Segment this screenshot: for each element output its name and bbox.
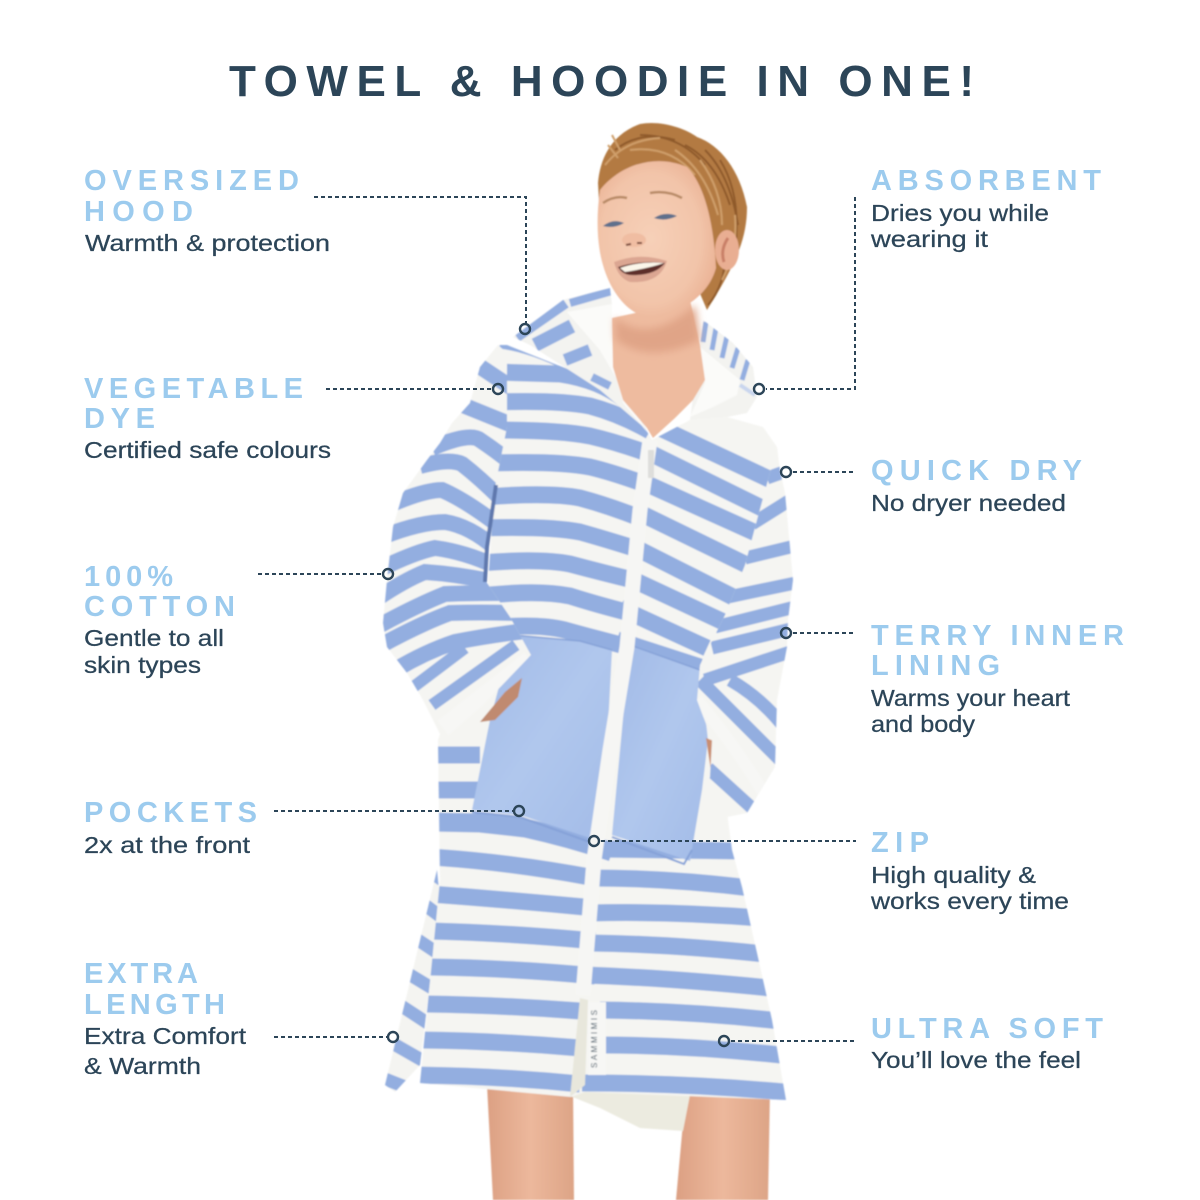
label: quick dry: No dryer needed	[871, 490, 1066, 516]
ear	[715, 230, 739, 270]
head	[598, 123, 747, 316]
label: 100% cotton: 100%	[84, 561, 173, 593]
connector: terry inner lining	[781, 628, 856, 638]
face	[598, 161, 716, 316]
figure: boy wearing striped hooded towel	[375, 123, 800, 1200]
pockets	[472, 635, 708, 864]
connector: extra length	[274, 1032, 398, 1042]
label: zip	[870, 827, 1069, 914]
label: oversized hood: OVERSIZED	[84, 165, 299, 197]
connector: quick dry	[781, 467, 856, 477]
label: quick dry	[871, 455, 1082, 516]
connector: oversized hood	[314, 197, 530, 334]
connector: absorbent	[754, 197, 855, 394]
label: vegetable dye	[84, 373, 331, 463]
legs	[487, 1085, 770, 1200]
side flap	[384, 870, 440, 1092]
zip	[583, 440, 654, 995]
label: absorbent: Dries you while	[871, 200, 1049, 226]
hands	[480, 678, 722, 778]
label: 100% cotton: Gentle to all	[84, 625, 224, 651]
hair strands	[605, 135, 738, 305]
label: terry inner lining: LINING	[871, 650, 1000, 682]
label: ultra soft: You’ll love the feel	[871, 1047, 1081, 1073]
label: absorbent: wearing it	[870, 226, 989, 252]
eyebrows	[603, 192, 682, 203]
label: terry inner lining	[871, 620, 1124, 737]
terry lining behind hem	[568, 1085, 690, 1131]
hair	[598, 123, 747, 310]
label: pockets: 2x at the front	[84, 832, 251, 858]
label: oversized hood: HOOD	[84, 196, 193, 228]
left pocket	[472, 635, 612, 842]
label: terry inner lining: and body	[871, 711, 976, 737]
label: pockets: POCKETS	[84, 797, 257, 829]
right sleeve	[696, 466, 794, 816]
terry hood lining	[567, 304, 740, 432]
label: extra length: Extra Comfort	[84, 1023, 247, 1049]
label: extra length: & Warmth	[84, 1053, 201, 1079]
label: quick dry: QUICK DRY	[871, 455, 1082, 487]
connector: vegetable dye	[326, 384, 503, 394]
label: 100% cotton	[84, 561, 235, 678]
label: terry inner lining: Warms your heart	[871, 685, 1071, 711]
label: absorbent	[870, 165, 1101, 252]
label: vegetable dye: DYE	[84, 403, 155, 435]
neck and chest	[612, 300, 705, 438]
connector: zip	[589, 836, 856, 846]
label: ultra soft	[871, 1013, 1103, 1073]
connector: ultra soft	[719, 1036, 856, 1046]
connector: 100% cotton	[258, 569, 393, 579]
label: 100% cotton: COTTON	[84, 591, 235, 623]
label: absorbent: ABSORBENT	[871, 165, 1101, 197]
label: oversized hood	[84, 165, 330, 256]
hood left	[514, 287, 641, 425]
sleeve fold shadow	[485, 485, 496, 582]
label: zip: works every time	[870, 888, 1069, 914]
eyes	[603, 214, 677, 227]
label: extra length: EXTRA	[84, 958, 198, 990]
label: extra length	[84, 958, 247, 1079]
connector: pockets	[274, 806, 524, 816]
brand label	[588, 1002, 606, 1075]
front slit	[570, 998, 588, 1097]
neck shadow	[615, 305, 700, 352]
left sleeve	[382, 346, 532, 732]
label: terry inner lining: TERRY INNER	[871, 620, 1124, 652]
mouth	[614, 257, 667, 282]
right pocket	[612, 645, 708, 861]
label: ultra soft: ULTRA SOFT	[871, 1013, 1103, 1045]
hood right	[690, 320, 756, 420]
hoodie torso	[419, 344, 787, 1101]
label: zip: High quality &	[871, 862, 1036, 888]
label: pockets	[84, 797, 257, 858]
label: zip: ZIP	[871, 827, 929, 859]
label: vegetable dye: Certified safe colours	[84, 437, 331, 463]
label: 100% cotton: skin types	[84, 652, 201, 678]
brand label: SAMMIMIS	[590, 1010, 599, 1068]
title: TOWEL & HOODIE IN ONE!	[229, 57, 974, 106]
label: extra length: LENGTH	[84, 989, 225, 1021]
label: oversized hood: Warmth & protection	[85, 230, 330, 256]
nose	[622, 233, 646, 247]
label: vegetable dye: VEGETABLE	[84, 373, 303, 405]
